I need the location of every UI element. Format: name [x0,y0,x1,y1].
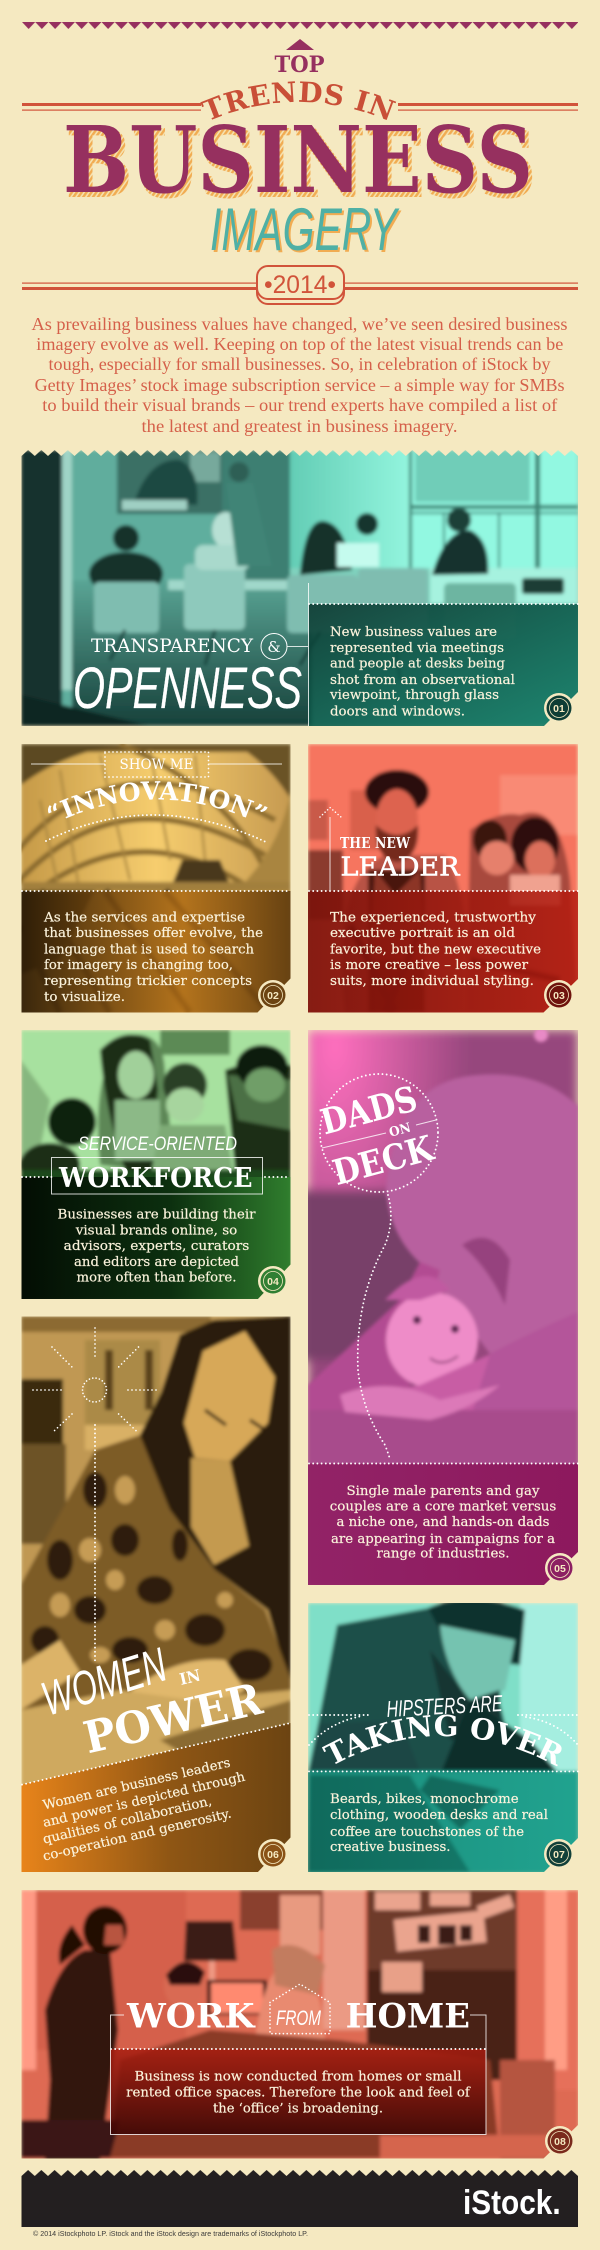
body text: coffee are touchstones of the [330,1825,524,1840]
divider lines [308,583,310,726]
icon: small triangle above title [286,39,314,50]
body text: advisors, experts, curators [64,1239,249,1254]
body text: and power is depicted through [42,1770,247,1831]
body text [329,625,515,720]
body text: is more creative – less power [330,958,529,973]
heading: women in power: IN [178,1666,202,1689]
badge 08 [543,2124,579,2159]
iStock logo: iStock. [463,2184,561,2222]
photo: businesswoman at desk [21,1316,291,1872]
intro paragraph: to build their visual brands – our trend experts have compiled a list of [42,395,557,415]
text backing panel [308,891,578,1013]
body text: language that is used to search [44,943,255,958]
heading: work from home: WORK [126,1996,256,2036]
heading: show me innovation: “INNOVATION” [48,781,268,818]
title word: IMAGERY: IMAGERY [210,196,400,263]
body text: New business values are [330,625,497,640]
badge 06: 06 [267,1849,279,1861]
body text: viewpoint, through glass [329,688,499,703]
badge 07 [543,1837,579,1873]
body text: couples are a core market versus [330,1500,556,1515]
body text: Business is now conducted from homes or small [134,2070,462,2084]
heading: dads on deck balloon: ON [388,1121,413,1141]
body text: the ‘office’ is broadening. [213,2101,383,2116]
heading: dads on deck balloon [316,1074,439,1194]
badge 04 [257,1264,291,1300]
body text: clothing, wooden desks and real [330,1808,548,1823]
title word: TOP: TOP [274,52,324,78]
body text: favorite, but the new executive [330,943,541,958]
body text: that businesses offer evolve, the [44,926,263,941]
badge 01 [543,691,579,727]
body text: co-operation and generosity. [42,1806,233,1864]
zigzag top edge [22,450,578,456]
badge 07: 07 [553,1849,565,1861]
heading: hipsters are taking over [322,1690,562,1766]
heading: hipsters are taking over: TAKING OVER [322,1714,562,1766]
photo: team around desk [20,1030,291,1300]
photo: bearded man at workbench [308,1599,578,1873]
body text [330,1484,556,1562]
body text: As the services and expertise [43,911,245,926]
panel 7: hipsters are taking over [308,1603,579,1872]
sunburst dotted icon [33,1328,158,1664]
dotted rule [22,890,290,892]
panel 5: dads on deck [300,1028,579,1586]
badge 02 [257,978,291,1013]
top zigzag ornament [22,22,578,29]
balloon string dotted [358,1195,391,1460]
photo: home office [21,1890,579,2160]
intro paragraph: imagery evolve as well. Keeping on top of the latest visual trends can be [36,334,563,354]
body text: and people at desks being [330,656,505,672]
body text: suits, more individual styling. [330,974,534,989]
heading: women in power [36,1639,267,1764]
body text: representing trickier concepts [44,974,252,989]
heading: service-oriented workforce: SERVICE-ORIENTED [78,1134,237,1155]
body text [42,1756,247,1864]
panel 8: work from home [21,1890,579,2160]
panel 6: women in power [21,1316,291,1873]
badge 06 [257,1837,291,1873]
title words: TRENDS IN on arc: TRENDS IN [200,81,396,120]
body text: and editors are depicted [74,1255,239,1270]
dotted rule [309,603,578,605]
badge 05: 05 [554,1563,566,1575]
photo: arched station roof [10,744,291,1013]
intro paragraph: tough, especially for small businesses. So, in celebration of iStock by [48,354,550,374]
text backing panel [110,2049,486,2134]
dotted rule [309,1715,578,1771]
badge 02: 02 [267,990,279,1002]
intro paragraph: the latest and greatest in business imagery. [142,416,458,436]
heading: work from home: FROM [276,2007,321,2030]
body text [126,2070,471,2116]
panel 2: show me innovation [21,744,290,1012]
heading: service-oriented workforce [52,1134,262,1194]
body text [58,1208,256,1286]
box outline [110,2015,486,2134]
text backing panel [22,1177,290,1299]
heading: dads on deck balloon: DADS [316,1078,422,1143]
panel 1: transparency and openness [21,450,579,727]
body text: rented office spaces. Therefore the look and feel of [126,2086,471,2101]
heading: women in power: POWER [79,1674,267,1764]
dotted rule [111,2048,486,2050]
heading: show me innovation [31,751,282,842]
body text: shot from an observational [330,673,515,688]
title block [22,39,578,305]
badge 03 [543,978,579,1013]
heading: transparency and openness: OPENNESS [73,656,302,721]
body text: Women are business leaders [42,1756,232,1813]
heading: the new leader [340,834,461,882]
body text: executive portrait is an old [330,926,515,941]
heading: transparency and openness [73,634,308,721]
dotted rule [22,1723,290,1785]
body text: creative business. [330,1840,450,1855]
badge 03: 03 [553,990,565,1002]
badge 05 [543,1551,579,1586]
title word shadow: IMAGERY: IMAGERY [212,198,402,265]
badge 08: 08 [554,2136,566,2148]
body text: doors and windows. [330,704,465,720]
photo: father and baby [300,1028,578,1586]
body text: The experienced, trustworthy [330,911,537,926]
text backing panel [308,604,578,726]
heading: women in power: WOMEN [36,1639,173,1727]
text backing panel [22,891,290,1013]
heading: transparency and openness: TRANSPARENCY [91,635,253,657]
text backing panel [22,1723,290,1872]
body text [330,1792,548,1855]
heading: the new leader: THE NEW [340,834,411,852]
badge 01: 01 [553,703,565,715]
title word: BUSINESS: BUSINESS [63,106,533,214]
panel 4: service-oriented workforce [20,1030,291,1300]
body text: for imagery is changing too, [44,958,233,973]
body text: Businesses are building their [58,1208,256,1223]
badge 04: 04 [267,1276,279,1288]
heading: the new leader: LEADER [340,852,461,882]
heading: work from home: HOME [346,1996,470,2036]
year badge [257,266,344,304]
text backing panel [308,1771,578,1872]
copyright note: © 2014 iStockphoto LP. iStock and the iStock design are trademarks of iStockphoto LP. [33,2229,308,2238]
body text: more often than before. [76,1271,236,1286]
heading: work from home [126,1984,470,2036]
heading: dads on deck balloon: DECK [328,1128,439,1194]
panel 3: the new leader [308,744,579,1014]
text backing panel [308,1464,578,1586]
intro paragraph: As prevailing business values have changed, we’ve seen desired business [32,314,568,334]
body text: to visualize. [44,990,125,1005]
dotted rule [309,1462,578,1464]
heading: hipsters are taking over: HIPSTERS ARE [386,1690,504,1722]
body text [330,911,541,989]
body text: visual brands online, so [75,1224,237,1239]
intro paragraph [32,314,568,436]
rules beside year [22,282,578,290]
arrow: upward dotted [320,808,341,891]
body text: Beards, bikes, monochrome [330,1792,519,1807]
body text: are appearing in campaigns for a [331,1532,555,1547]
year badge: •2014• [264,271,336,299]
body text: qualities of collaboration, [42,1794,213,1847]
footer band [22,2170,578,2227]
dotted rule [309,890,578,892]
heading: transparency and openness: & [267,638,281,656]
photo: meeting room [21,450,579,726]
photo: smiling young executive [308,744,578,1014]
body text: Single male parents and gay [346,1484,540,1499]
body text: a niche one, and hands-on dads [336,1515,550,1530]
body text: range of industries. [376,1547,510,1562]
heading: show me innovation: SHOW ME [120,757,194,773]
body text: represented via meetings [330,641,504,656]
intro paragraph: Getty Images’ stock image subscription service – a simple way for SMBs [35,375,565,395]
dotted rule [22,1176,290,1178]
heading: service-oriented workforce: WORKFORCE [58,1163,253,1194]
decorative rules beside trends [22,103,578,111]
zigzag top edge of footer [22,2170,578,2176]
body text [43,911,263,1005]
